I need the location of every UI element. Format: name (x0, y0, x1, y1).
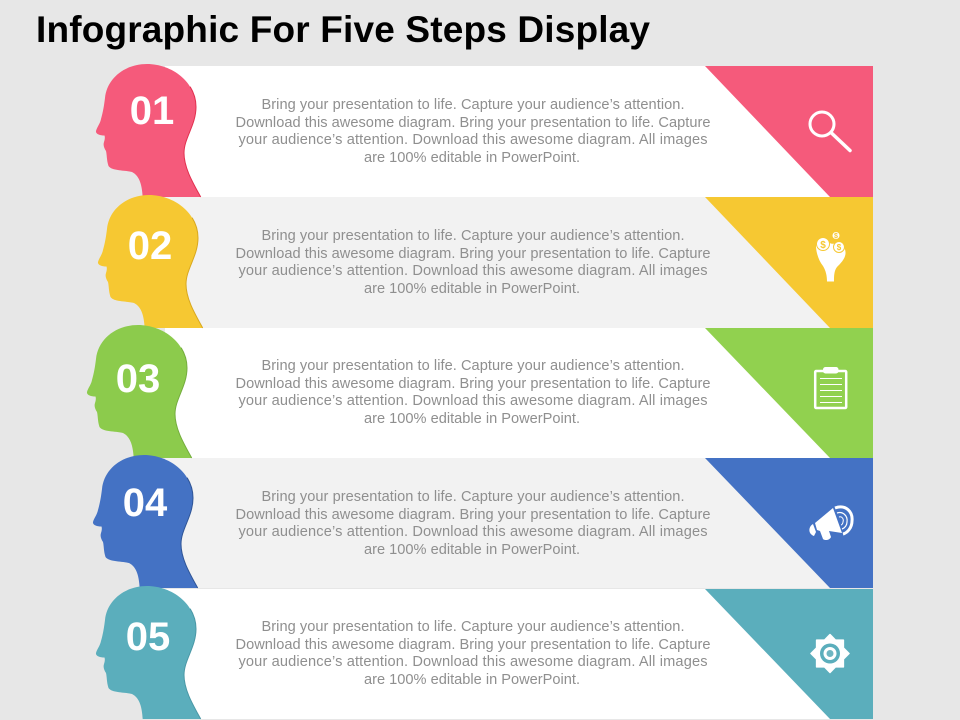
icon: money bag funnel (816, 232, 846, 282)
text: step 3: Bring your presentation to life. Capture your audience’s attention. (262, 358, 684, 374)
text: step 1: Download this awesome diagram. Bring your presentation to life. Capture (236, 115, 710, 131)
panel: step 5 (165, 589, 873, 719)
number: 03: 03 (116, 357, 160, 401)
text: step 3 (236, 358, 710, 427)
text: step 4: your audience’s attention. Download this awesome diagram. All images (238, 524, 708, 540)
text: step 3: your audience’s attention. Download this awesome diagram. All images (238, 393, 708, 409)
icon: money bag funnel: $ (834, 233, 838, 240)
text: step 3: Download this awesome diagram. Bring your presentation to life. Capture (236, 376, 710, 392)
text: step 2 (236, 228, 710, 297)
corner: step 2 (705, 197, 873, 328)
text: step 1 (236, 97, 710, 166)
text: step 1: your audience’s attention. Download this awesome diagram. All images (238, 132, 708, 148)
number: 04: 04 (123, 481, 168, 525)
text: step 2: Bring your presentation to life. Capture your audience’s attention. (262, 228, 684, 244)
head: step 3 (87, 325, 192, 458)
text: step 3: are 100% editable in PowerPoint. (364, 411, 580, 427)
icon: magnifying glass (810, 112, 850, 150)
text: step 5: your audience’s attention. Download this awesome diagram. All images (238, 654, 708, 670)
text: step 2: your audience’s attention. Download this awesome diagram. All images (238, 263, 708, 279)
icon: gear (811, 634, 849, 672)
number: 01: 01 (130, 89, 174, 133)
panel: step 4 (165, 458, 873, 588)
text: step 4 (236, 489, 710, 558)
head: step 5 (96, 586, 201, 719)
icon: money bag funnel: $ (820, 240, 826, 251)
number: 05: 05 (126, 615, 170, 659)
panel: step 1 (165, 66, 873, 197)
text: step 4: Download this awesome diagram. Bring your presentation to life. Capture (236, 507, 710, 523)
icon: money bag funnel: $ (837, 243, 842, 252)
head: step 4 (93, 455, 198, 588)
text: step 4: Bring your presentation to life. Capture your audience’s attention. (262, 489, 684, 505)
head: step 1 (96, 64, 201, 197)
text: step 1: Bring your presentation to life. Capture your audience’s attention. (262, 97, 684, 113)
corner: step 5 (705, 589, 873, 719)
panel: step 3 (165, 328, 873, 458)
text: step 5 (236, 619, 710, 688)
icon: megaphone (809, 507, 852, 540)
head: step 2 (98, 195, 203, 328)
icon: clipboard (815, 367, 846, 408)
panel: step 2 (165, 197, 873, 328)
text: step 5: Bring your presentation to life. Capture your audience’s attention. (262, 619, 684, 635)
number: 02: 02 (128, 224, 172, 268)
text: step 1: are 100% editable in PowerPoint. (364, 150, 580, 166)
title: Infographic For Five Steps Display (36, 9, 650, 50)
corner: step 4 (705, 458, 873, 588)
corner: step 3 (705, 328, 873, 458)
text: step 2: Download this awesome diagram. Bring your presentation to life. Capture (236, 246, 710, 262)
text: step 2: are 100% editable in PowerPoint. (364, 281, 580, 297)
corner: step 1 (705, 66, 873, 197)
text: step 5: Download this awesome diagram. Bring your presentation to life. Capture (236, 637, 710, 653)
text: step 4: are 100% editable in PowerPoint. (364, 542, 580, 558)
text: step 5: are 100% editable in PowerPoint. (364, 672, 580, 688)
